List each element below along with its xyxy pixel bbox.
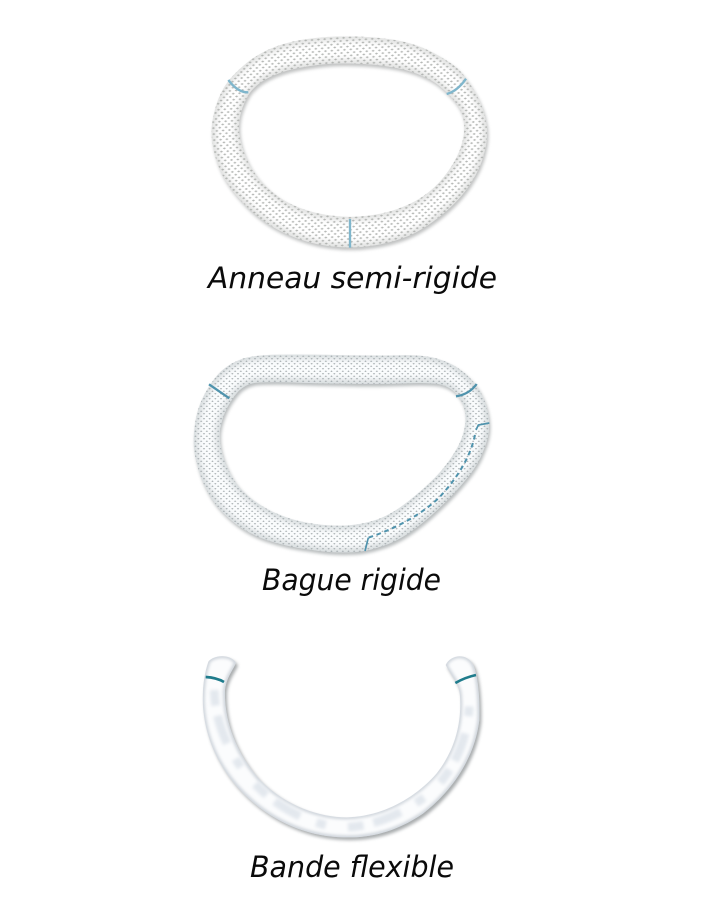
- label: Anneau semi-rigide: Anneau semi-rigide: [206, 261, 497, 295]
- label: Bague rigide: Bague rigide: [262, 563, 441, 597]
- label: Bande flexible: Bande flexible: [250, 850, 454, 884]
- blue marker lines: [228, 79, 466, 248]
- teal marker lines: [206, 675, 476, 683]
- blue marker lines: [209, 384, 489, 551]
- ring: semi-rigid annuloplasty ring: [211, 36, 490, 252]
- ring: rigid ring: [193, 354, 492, 557]
- band: flexible band: [202, 656, 484, 842]
